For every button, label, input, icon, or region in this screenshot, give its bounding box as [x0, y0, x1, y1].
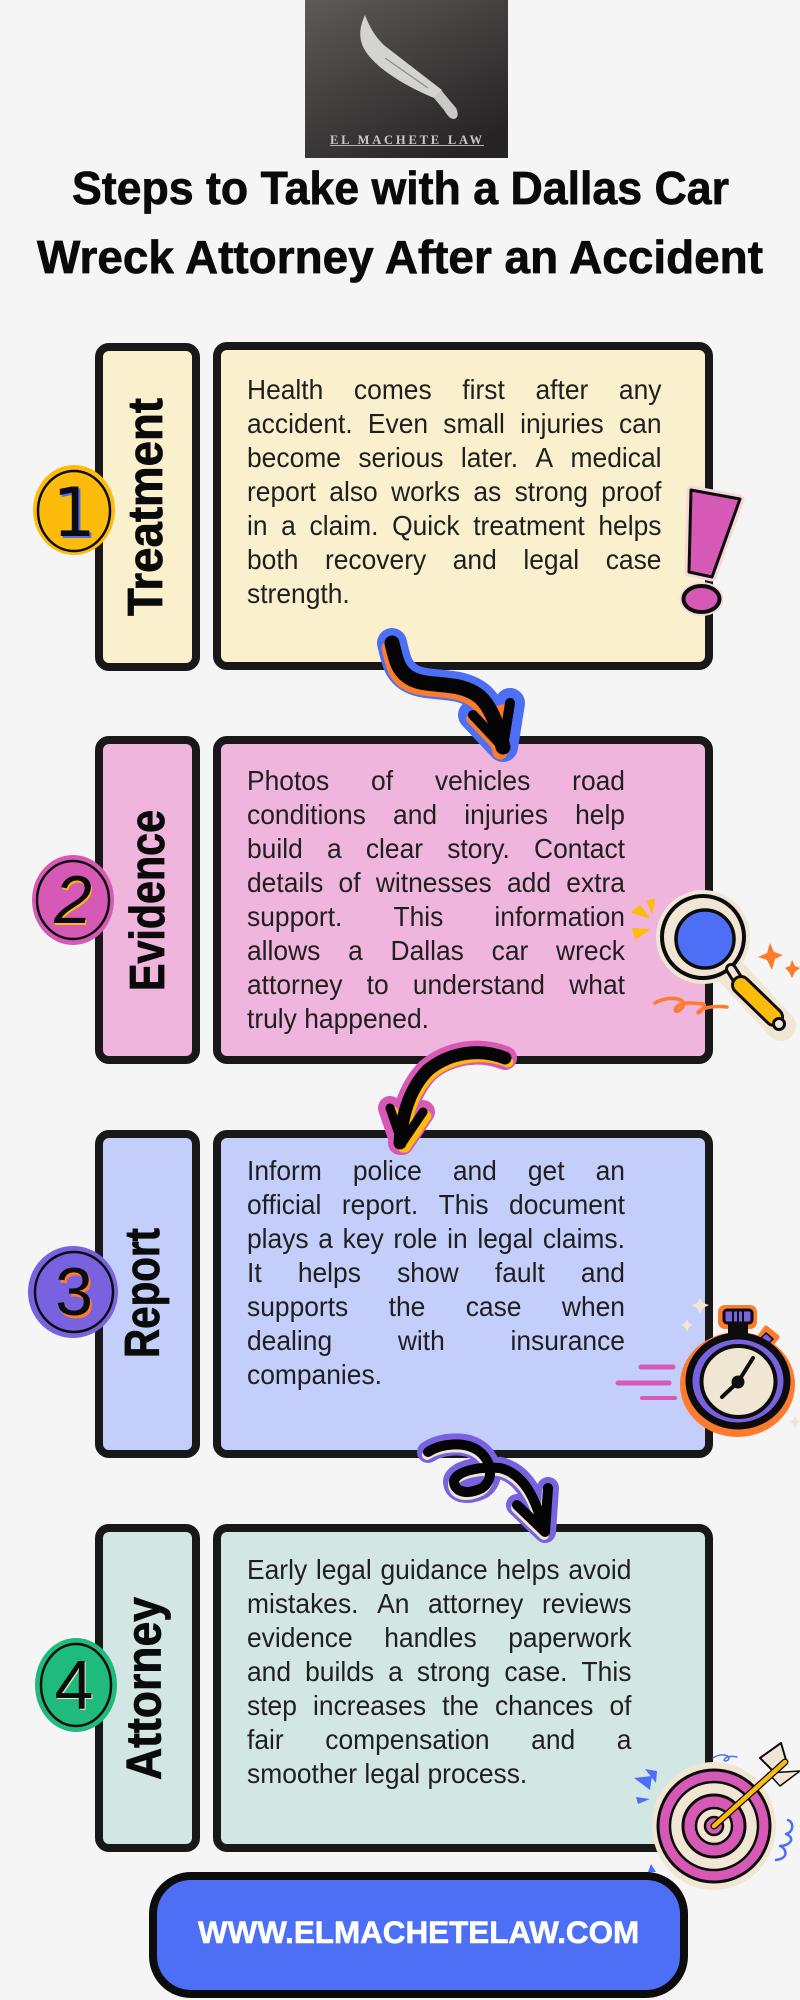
text block: report: police: [352, 1155, 421, 1186]
tab label: Attorney: Attorney: [118, 1597, 172, 1780]
text block: treatment: comes: [353, 374, 431, 405]
text block: attorney: the: [442, 1690, 478, 1721]
tab label: Evidence: Evidence: [121, 810, 175, 991]
text block: attorney: step: [246, 1690, 296, 1721]
text block: report: and: [452, 1155, 496, 1186]
text block: attorney: evidence: [246, 1622, 352, 1653]
text block: attorney: Early: [246, 1554, 307, 1585]
text block: treatment: Even: [367, 408, 428, 439]
text block: evidence: add: [506, 867, 551, 898]
text block: evidence: clear: [365, 833, 423, 864]
text block: evidence: Contact: [534, 833, 624, 864]
text block: treatment: works: [391, 476, 460, 507]
text block: treatment: claim.: [309, 510, 378, 541]
badge: number 3: 3: [57, 1257, 95, 1333]
text block: treatment: and: [452, 544, 496, 575]
text block: treatment: strong: [514, 476, 587, 507]
text block: treatment: both: [246, 544, 298, 575]
text block: evidence: of: [371, 765, 393, 796]
text block: report: the: [388, 1291, 425, 1322]
tab label: Treatment: Treatment: [119, 398, 173, 616]
badge: number 1: 1: [54, 476, 98, 555]
text block: report: fault: [494, 1257, 544, 1288]
text block: attorney: compensation: [325, 1724, 489, 1755]
text block: evidence: road: [572, 765, 624, 796]
text block: report: report.: [341, 1189, 418, 1220]
text block: evidence: car: [491, 935, 528, 966]
text block: treatment: small: [443, 408, 504, 439]
text block: report: role: [393, 1223, 437, 1254]
text block: evidence: allows: [246, 935, 320, 966]
text block: attorney: increases: [313, 1690, 426, 1721]
text block: report: case: [465, 1291, 521, 1322]
badge: number 2: 2: [53, 862, 92, 938]
text block: report: It: [246, 1257, 261, 1288]
text block: attorney: [246, 1554, 632, 1789]
text block: treatment: [246, 374, 662, 609]
website url: WWW.ELMACHETELAW.COM: [198, 1915, 639, 1950]
text block: attorney: and: [246, 1656, 291, 1687]
logo: El Machete Law: [305, 0, 508, 158]
text block: treatment: medical: [570, 442, 661, 473]
text block: treatment: recovery: [324, 544, 426, 575]
text block: report: and: [580, 1257, 624, 1288]
text block: treatment: also: [329, 476, 377, 507]
text block: attorney: handles: [384, 1622, 476, 1653]
panel: evidence text card: [213, 736, 713, 1064]
text block: treatment: report: [246, 476, 315, 507]
text block: attorney: attorney: [427, 1588, 523, 1619]
text block: evidence: This: [393, 901, 443, 932]
text block: report: helps: [297, 1257, 360, 1288]
arrow: report to attorney: [427, 1444, 548, 1535]
text block: treatment: Health: [246, 374, 323, 405]
panel: treatment text card: [213, 342, 713, 670]
text block: attorney: smoother legal process.: [246, 1758, 527, 1789]
text block: evidence: information: [494, 901, 624, 932]
panel: treatment tab: [95, 343, 200, 671]
text block: treatment: first: [462, 374, 504, 405]
text block: treatment: become: [246, 442, 340, 473]
text block: treatment: a: [281, 510, 295, 541]
text block: report: plays: [246, 1223, 308, 1254]
text block: evidence: conditions: [246, 799, 365, 830]
icon: stopwatch: [618, 1298, 800, 1437]
badge: number 3: 3: [55, 1254, 93, 1330]
text block: attorney: paperwork: [508, 1622, 631, 1653]
text block: evidence: injuries: [464, 799, 547, 830]
arrow: treatment to evidence: [389, 643, 510, 752]
text block: treatment: as: [473, 476, 501, 507]
text block: evidence: a: [326, 833, 341, 864]
text block: evidence: build: [246, 833, 302, 864]
text block: attorney: mistakes.: [246, 1588, 358, 1619]
panel: report tab: [95, 1130, 200, 1458]
text block: treatment: treatment: [473, 510, 584, 541]
text block: treatment: injuries: [520, 408, 603, 439]
text block: treatment: Quick: [392, 510, 459, 541]
text block: evidence: to: [366, 969, 388, 1000]
text block: attorney: guidance: [380, 1554, 487, 1585]
text block: attorney: reviews: [541, 1588, 631, 1619]
text block: evidence: extra: [566, 867, 624, 898]
text block: attorney: builds: [305, 1656, 374, 1687]
badge: number 1: 1: [52, 474, 96, 553]
panel: report text card: [213, 1130, 713, 1458]
text block: attorney: a: [616, 1724, 631, 1755]
text block: treatment: helps: [598, 510, 661, 541]
badge: number 2: 2: [54, 864, 93, 940]
icon: magnifying glass: [632, 890, 800, 1030]
text block: evidence: Photos: [246, 765, 329, 796]
panel: attorney text card: [213, 1524, 713, 1852]
text block: report: official: [246, 1189, 321, 1220]
title: Steps to Take with a Dallas Car: [72, 162, 729, 214]
text block: attorney: and: [531, 1724, 575, 1755]
badge: number 4: 4: [55, 1646, 93, 1724]
text block: evidence: vehicles: [434, 765, 530, 796]
panel: evidence tab: [95, 736, 200, 1064]
text block: attorney: An: [377, 1588, 409, 1619]
text block: report: legal: [477, 1223, 533, 1254]
text block: attorney: strong: [416, 1656, 490, 1687]
text block: attorney: legal: [315, 1554, 371, 1585]
text block: report: claims.: [542, 1223, 624, 1254]
text block: report: document: [509, 1189, 624, 1220]
text block: evidence: attorney: [246, 969, 342, 1000]
badge: number 2: [32, 855, 114, 945]
text block: treatment: serious: [358, 442, 443, 473]
text block: report: show: [397, 1257, 458, 1288]
text block: report: when: [561, 1291, 624, 1322]
text block: treatment: in: [246, 510, 267, 541]
icon: exclamation mark: [680, 490, 740, 616]
text block: evidence: a: [348, 935, 362, 966]
text block: evidence: story.: [447, 833, 509, 864]
text block: attorney: case.: [504, 1656, 567, 1687]
arrow: evidence to report: [390, 1053, 508, 1147]
text block: treatment: can: [618, 408, 661, 439]
text block: treatment: proof: [601, 476, 661, 507]
text block: report: companies.: [246, 1359, 382, 1390]
text block: evidence: help: [575, 799, 624, 830]
footer website button: [149, 1872, 688, 1998]
badge: number 4: 4: [56, 1647, 94, 1725]
text block: evidence: [246, 765, 625, 1034]
text block: report: get: [527, 1155, 564, 1186]
text block: evidence: truly happened.: [246, 1003, 429, 1034]
title: Wreck Attorney After an Accident: [37, 231, 763, 283]
text block: report: supports: [246, 1291, 348, 1322]
text block: report: with: [397, 1325, 444, 1356]
text block: evidence: witnesses: [375, 867, 491, 898]
text block: attorney: avoid: [568, 1554, 631, 1585]
text block: report: in: [447, 1223, 467, 1254]
text block: evidence: wreck: [556, 935, 624, 966]
text block: attorney: This: [581, 1656, 631, 1687]
badge: number 4: [35, 1638, 117, 1732]
tab label: Report: Report: [116, 1228, 170, 1358]
text block: report: Inform: [246, 1155, 321, 1186]
text block: evidence: support.: [246, 901, 342, 932]
text block: report: insurance: [510, 1325, 624, 1356]
text block: report: an: [595, 1155, 624, 1186]
text block: treatment: A: [535, 442, 553, 473]
text block: evidence: details: [246, 867, 323, 898]
text block: report: dealing: [246, 1325, 332, 1356]
badge: number 3: [28, 1246, 118, 1338]
badge: number 1: [33, 465, 115, 555]
icon: target with dart: [634, 1743, 800, 1890]
panel: attorney tab: [95, 1524, 200, 1852]
text block: report: key: [342, 1223, 383, 1254]
text block: evidence: and: [393, 799, 437, 830]
text block: evidence: Dallas: [390, 935, 463, 966]
text block: attorney: of: [609, 1690, 631, 1721]
text block: evidence: understand: [412, 969, 544, 1000]
text block: treatment: strength.: [246, 578, 349, 609]
logo: El Machete Law: EL MACHETE LAW: [330, 133, 484, 147]
text block: treatment: any: [618, 374, 661, 405]
text block: evidence: what: [569, 969, 624, 1000]
text block: attorney: helps: [496, 1554, 559, 1585]
text block: report: This: [438, 1189, 488, 1220]
text block: report: a: [318, 1223, 332, 1254]
text block: treatment: legal: [523, 544, 579, 575]
text block: attorney: fair: [246, 1724, 283, 1755]
text block: evidence: of: [338, 867, 360, 898]
title: [37, 162, 763, 283]
text block: attorney: a: [388, 1656, 402, 1687]
text block: treatment: after: [535, 374, 588, 405]
text block: treatment: case: [605, 544, 661, 575]
text block: report: [246, 1155, 625, 1390]
text block: treatment: later.: [460, 442, 518, 473]
text block: attorney: chances: [494, 1690, 593, 1721]
text block: treatment: accident.: [246, 408, 352, 439]
